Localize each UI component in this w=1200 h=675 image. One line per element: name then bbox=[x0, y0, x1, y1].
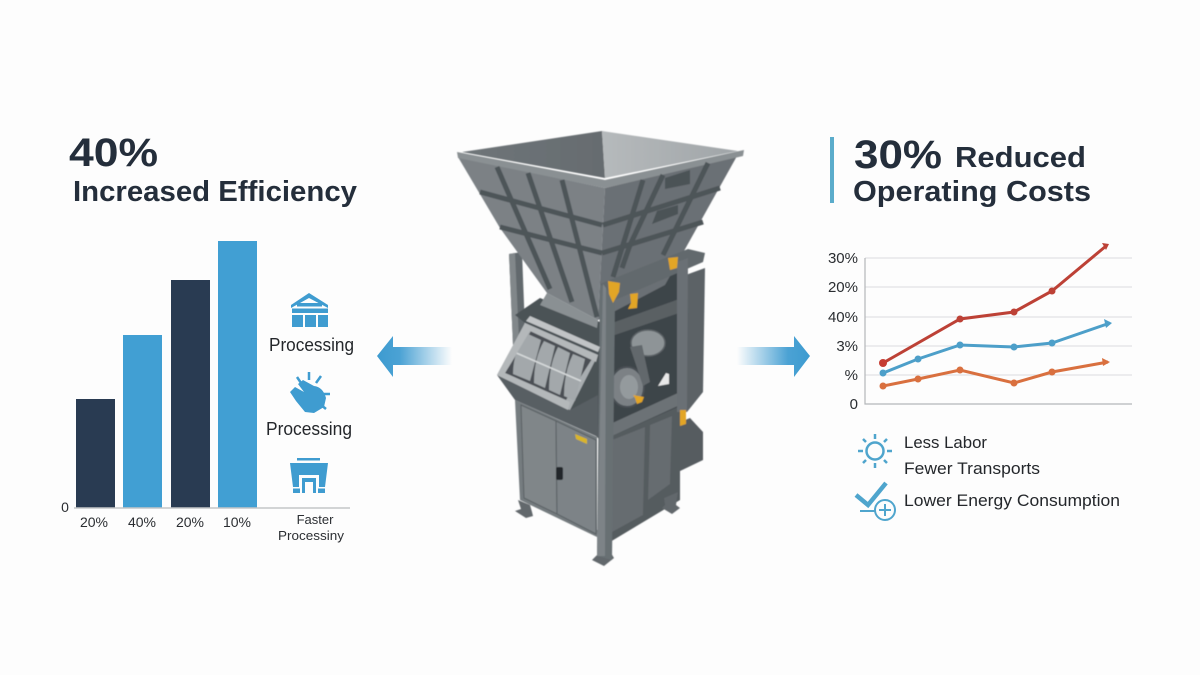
icon: sun bbox=[858, 434, 892, 468]
bar chart: 20% bbox=[80, 514, 108, 530]
line chart bbox=[828, 243, 1132, 413]
bar chart: 20% bbox=[176, 514, 204, 530]
heading: operating costs: Operating Costs bbox=[853, 176, 1091, 208]
shredder machine bbox=[457, 131, 744, 566]
bar chart: 10% bbox=[223, 514, 251, 530]
mechanism behind shredder bbox=[515, 298, 600, 440]
label: processing 1: Processing bbox=[269, 335, 354, 355]
shredder chamber bbox=[497, 316, 600, 437]
line chart: 3% bbox=[836, 338, 858, 355]
hopper vents bbox=[652, 170, 690, 224]
panel: reduced operating costs bbox=[828, 133, 1132, 520]
hopper rim bbox=[457, 150, 744, 188]
panel: increased efficiency bbox=[61, 131, 357, 543]
bar chart bbox=[61, 241, 350, 530]
heading: increased efficiency: Increased Efficiency bbox=[73, 176, 357, 208]
hopper interior right bbox=[602, 131, 738, 178]
heading: 30%: 30% bbox=[854, 133, 942, 177]
line chart: 30% bbox=[828, 250, 858, 267]
blue series bbox=[880, 319, 1112, 376]
line chart: % bbox=[845, 367, 858, 384]
cabinet side bbox=[610, 400, 680, 542]
label: less labor: Less Labor bbox=[904, 433, 987, 452]
hopper interior left bbox=[462, 131, 605, 178]
line chart: 20% bbox=[828, 279, 858, 296]
side box bbox=[678, 418, 703, 472]
orange series bbox=[880, 358, 1110, 390]
rear frame post left bbox=[509, 252, 525, 345]
label: faster processing: Faster bbox=[297, 512, 334, 527]
heading: reduced: Reduced bbox=[955, 142, 1086, 174]
line chart: 0 bbox=[850, 396, 858, 413]
heading: 40%: 40% bbox=[69, 131, 158, 175]
icon: hand bbox=[290, 372, 330, 413]
bar chart: 0 bbox=[61, 499, 69, 515]
label: processing 2: Processing bbox=[266, 419, 352, 439]
accent bar bbox=[830, 137, 834, 203]
hopper left face bbox=[458, 157, 605, 320]
drive compartment bbox=[608, 258, 682, 437]
hopper right face bbox=[598, 156, 737, 320]
icon: warehouse bbox=[291, 293, 328, 327]
line chart: 40% bbox=[828, 309, 858, 326]
feet bbox=[515, 492, 680, 566]
rear frame post right bbox=[680, 268, 705, 412]
yellow clamps bbox=[608, 257, 686, 426]
label: lower energy consumption: Lower Energy Consumption bbox=[904, 491, 1120, 510]
hopper ribs bbox=[480, 163, 720, 317]
hopper outlet bbox=[540, 293, 598, 328]
red series bbox=[879, 243, 1109, 367]
arrow: left bbox=[377, 336, 452, 377]
icon: facility bbox=[290, 458, 328, 493]
cabinet front bbox=[515, 400, 597, 537]
front frame bbox=[597, 249, 705, 560]
icon: check plus bbox=[856, 483, 895, 520]
bar chart: 40% bbox=[128, 514, 156, 530]
arrow: right bbox=[737, 336, 810, 377]
hopper bbox=[457, 131, 744, 328]
label: fewer transports: Fewer Transports bbox=[904, 459, 1040, 478]
label: processing 3: Processiny bbox=[278, 528, 345, 543]
